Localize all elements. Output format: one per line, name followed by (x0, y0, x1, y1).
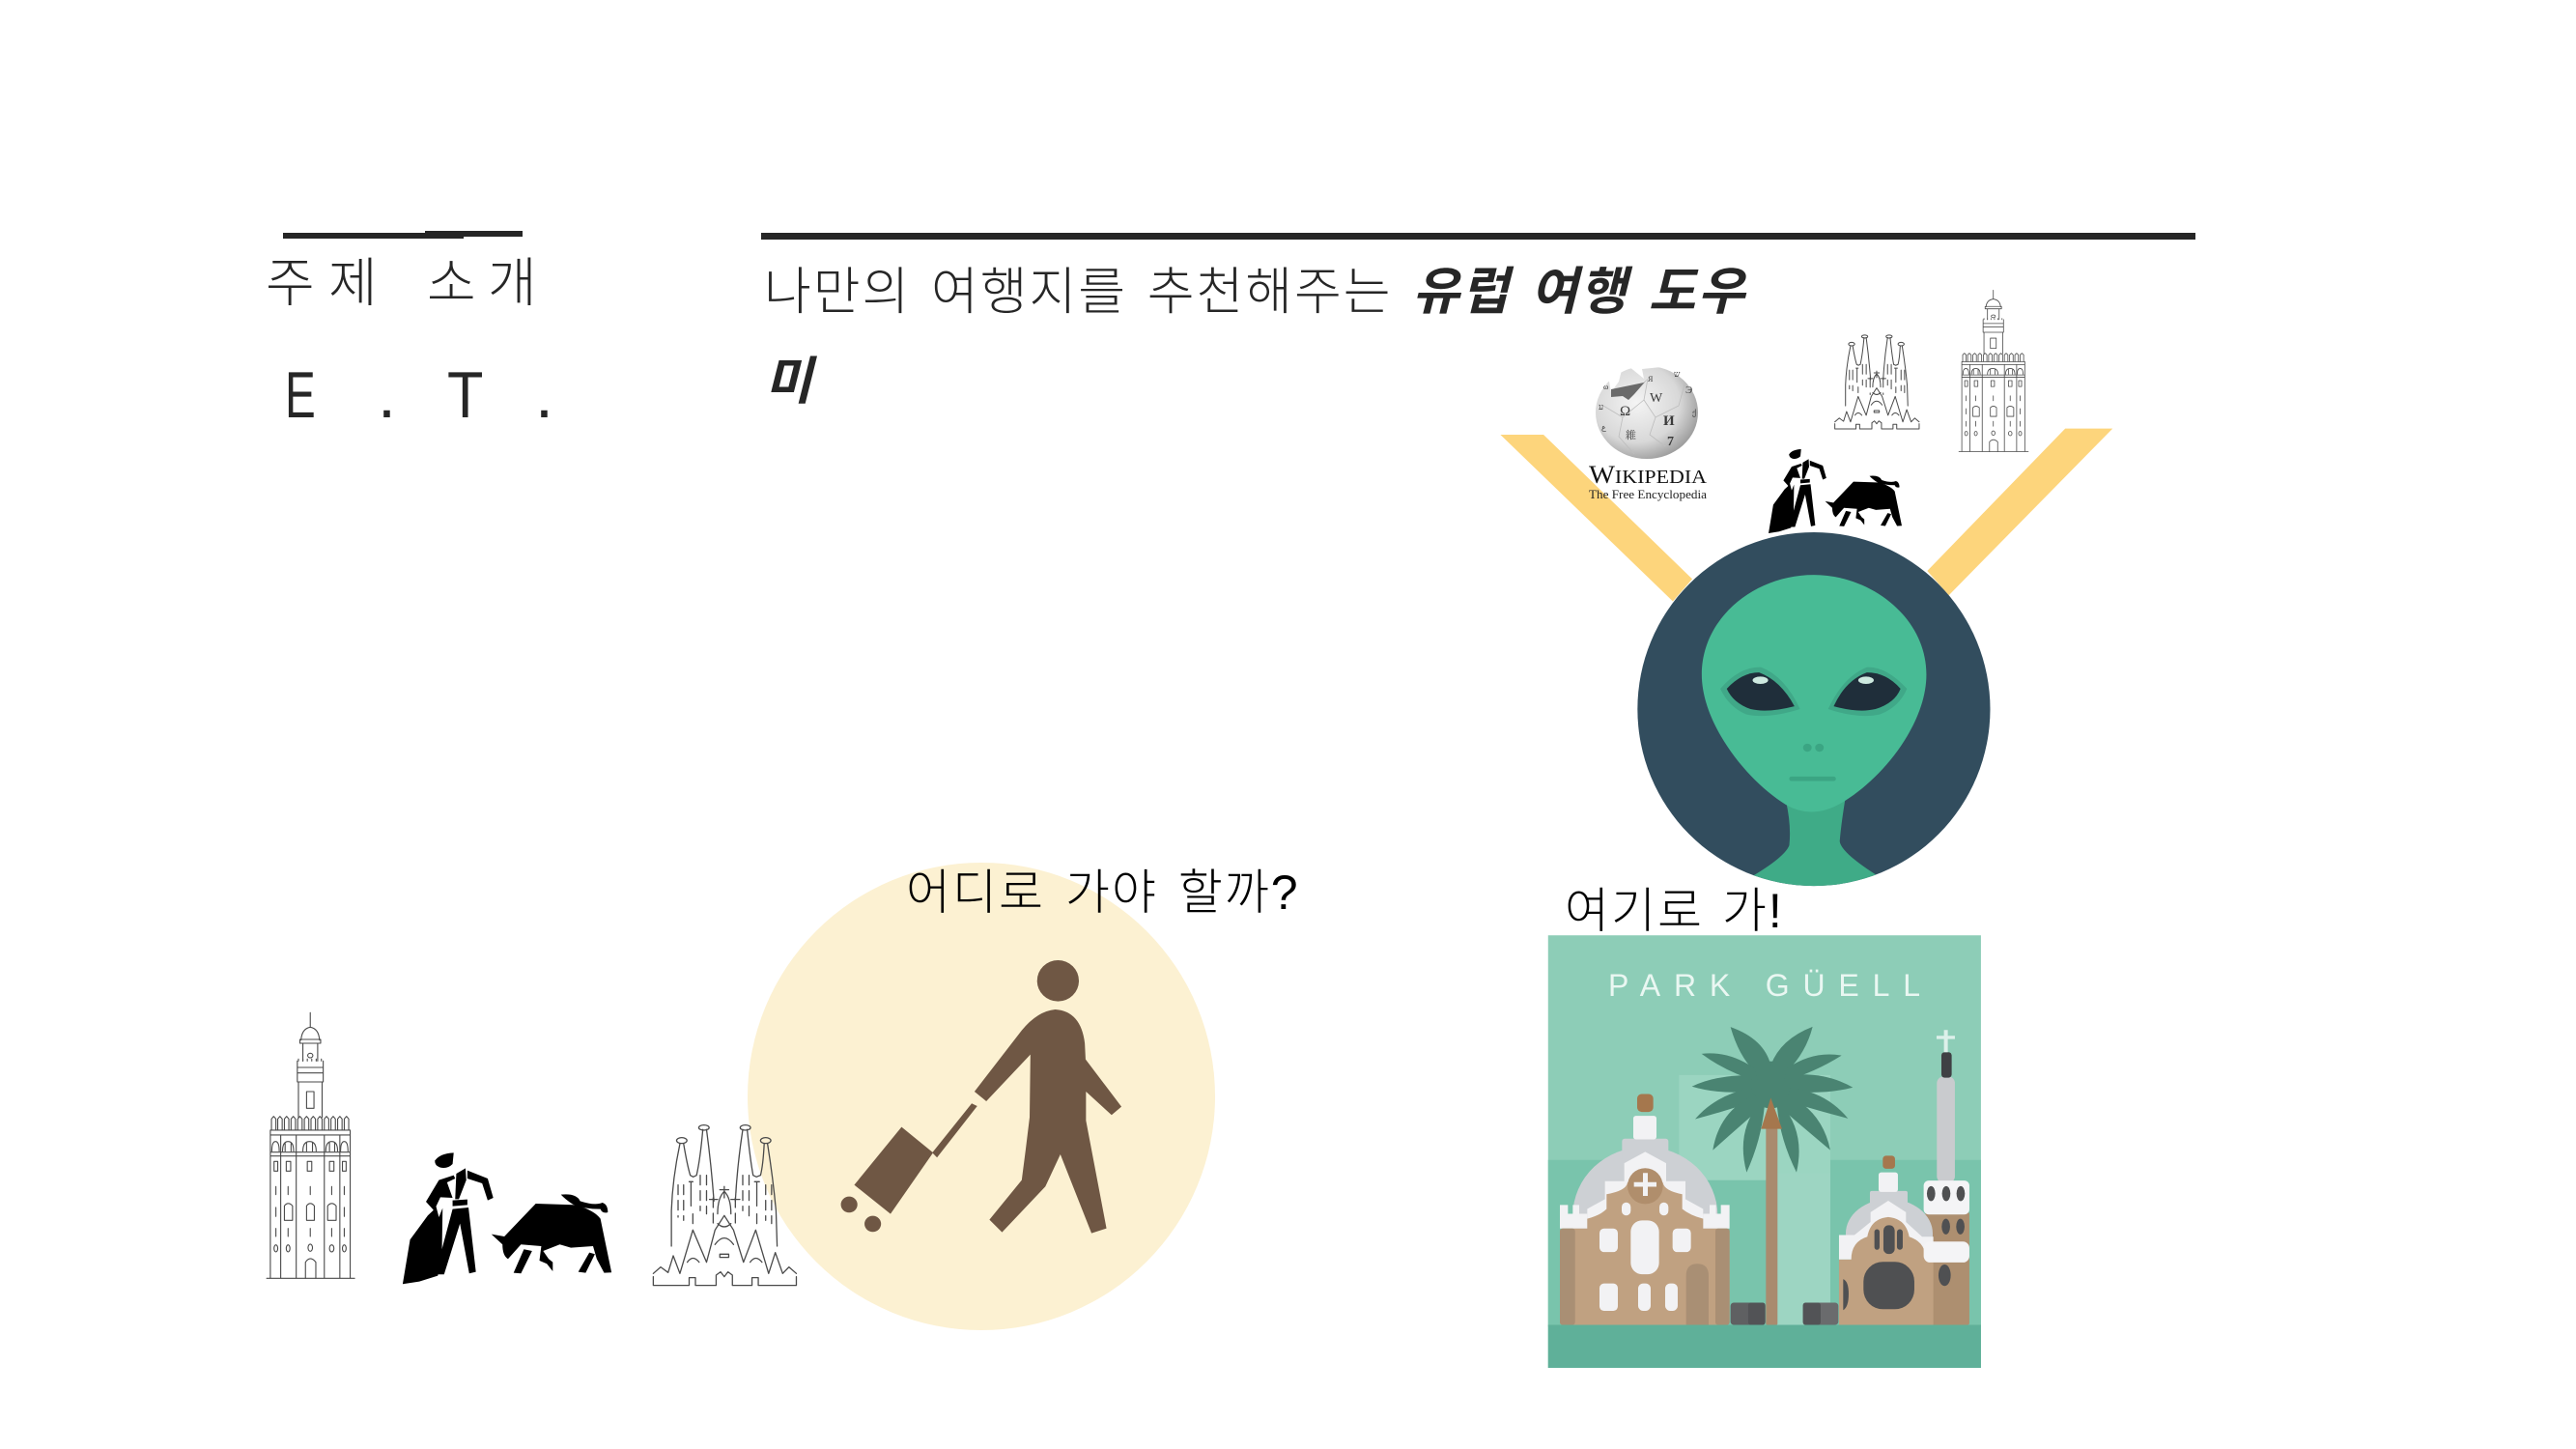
icon: Wikipedia globe logo: W (1650, 391, 1663, 406)
icon: Wikipedia globe logo: ქ (1692, 409, 1696, 417)
icon: Wikipedia globe logo: WIKIPEDIA (1589, 461, 1708, 489)
icon: Wikipedia globe logo (1589, 362, 1708, 501)
icon: Wikipedia globe logo: И (1663, 413, 1675, 429)
palm tree (1692, 1027, 1853, 1325)
icon: Sagrada Familia (large) (653, 1125, 796, 1286)
caption: where should I go?: 어디로 가야 할까? (906, 866, 1300, 920)
icon: Wikipedia globe logo: ω (1603, 383, 1608, 391)
panel: Park Guell poster (1548, 935, 1981, 1368)
icon: Sagrada Familia (small) (1835, 335, 1919, 429)
team name: E.T.: E (285, 359, 316, 432)
icon: Wikipedia globe logo: Я (1648, 375, 1654, 384)
icon: Torre del Oro (large) (267, 1012, 354, 1278)
beige circle behind traveller (748, 863, 1215, 1330)
team name: E.T. (285, 357, 553, 432)
icon: Wikipedia globe logo: Ω (1620, 404, 1630, 419)
right Gaudi building with spire (1839, 1030, 1969, 1325)
icon: Wikipedia globe logo: Э (1685, 384, 1692, 396)
icon: Torre del Oro (small) (1959, 290, 2028, 452)
icon: Wikipedia globe logo: ש (1674, 369, 1681, 379)
title: line 1: 나만의 여행지를 추천해주는 유럽 여행 도우 (764, 264, 1748, 321)
poster title: PARK GUELL: PARK GÜELL (1608, 968, 1920, 1003)
main title rule (761, 233, 2195, 240)
icon: matador and bull (large) (403, 1152, 611, 1284)
yellow V ribbon (1500, 429, 2112, 602)
team name: E.T.: . (535, 358, 553, 432)
title: line 2: 미 (765, 354, 817, 411)
team name: E.T.: T (447, 357, 483, 432)
heading: topic introduction: 주제소개 (266, 253, 537, 313)
icon: Wikipedia globe logo: 維 (1626, 429, 1636, 441)
icon: matador and bull (small) (1769, 449, 1902, 533)
icon: Wikipedia globe logo: ع (1601, 423, 1606, 432)
left Gaudi building (1560, 1094, 1730, 1325)
icon: traveller pulling suitcase (841, 960, 1121, 1234)
icon: Wikipedia globe logo: 7 (1667, 435, 1674, 449)
left heading rule (283, 231, 523, 239)
gate stones (1731, 1303, 1838, 1325)
icon: Wikipedia globe logo: ע (1599, 402, 1603, 412)
caption: here, go!: 여기로 가! (1565, 884, 1784, 938)
icon: Wikipedia globe logo: The Free Encyclopedia (1589, 487, 1707, 501)
team name: E.T.: . (378, 358, 396, 432)
icon: alien in circle (1637, 532, 1991, 895)
